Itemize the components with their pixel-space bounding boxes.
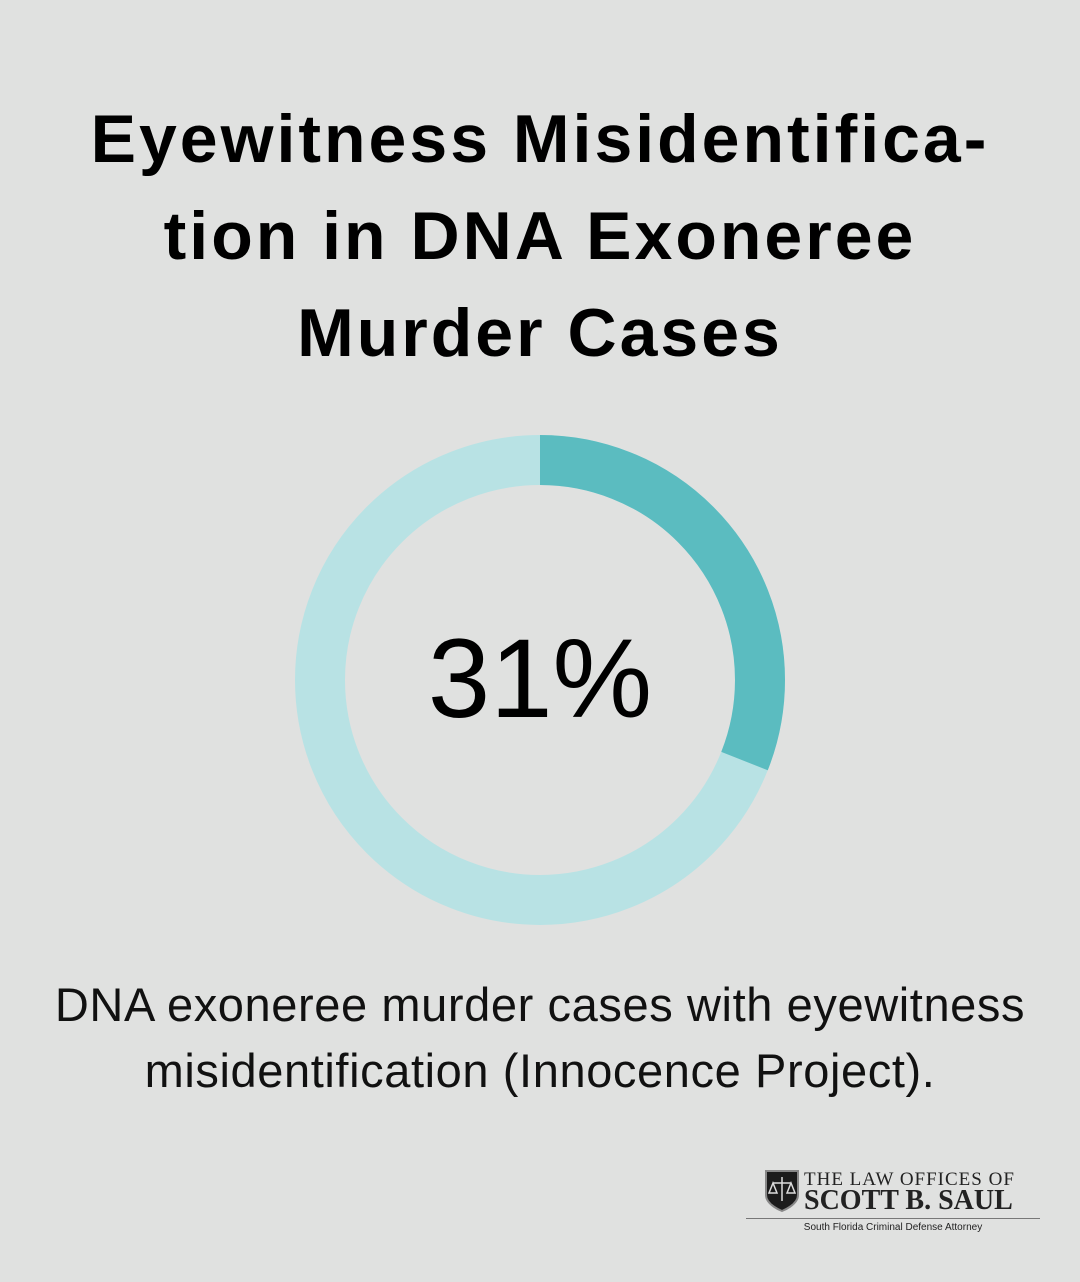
caption: misidentification (Innocence Project).	[145, 1044, 935, 1097]
logo: THE LAW OFFICES OF	[804, 1169, 1015, 1190]
caption	[55, 978, 1025, 1097]
logo: SCOTT B. SAUL	[804, 1185, 1013, 1216]
logo	[746, 1169, 1040, 1233]
title: Eyewitness Misidentifica-	[91, 101, 989, 177]
title: Murder Cases	[297, 295, 783, 371]
donut chart: 31%	[428, 616, 652, 741]
icon: shield	[765, 1170, 799, 1212]
logo: South Florida Criminal Defense Attorney	[804, 1222, 982, 1233]
title: tion in DNA Exoneree	[164, 198, 916, 274]
title	[91, 101, 989, 371]
caption: DNA exoneree murder cases with eyewitness	[55, 978, 1025, 1031]
